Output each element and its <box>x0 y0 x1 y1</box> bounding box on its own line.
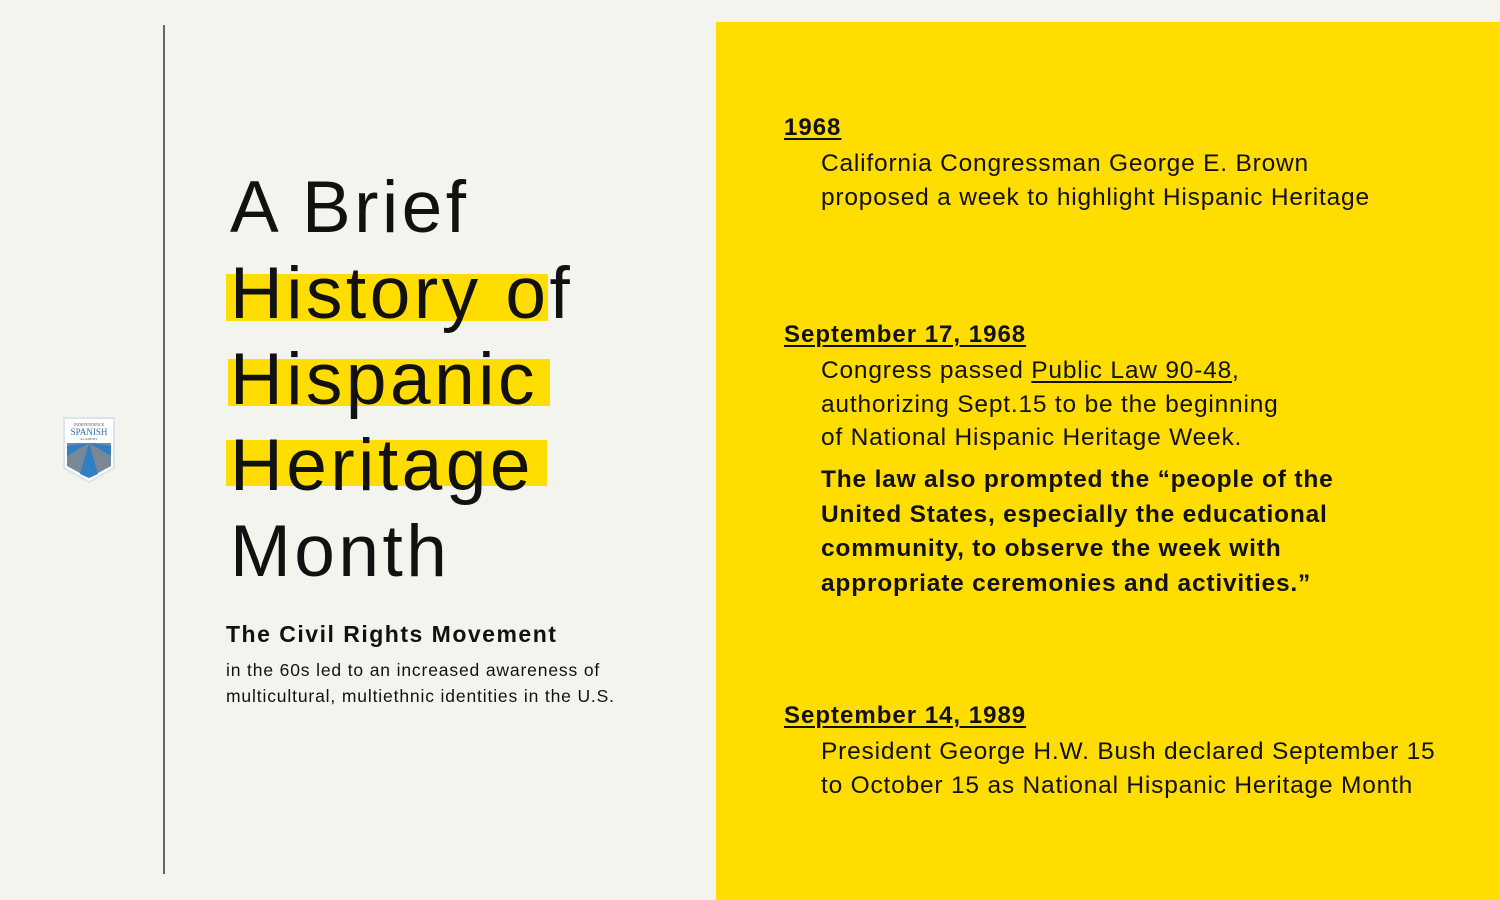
title: Heritage <box>230 425 534 506</box>
icon: school logo shield: INDEPENDENCE <box>74 422 105 427</box>
title <box>226 167 573 592</box>
text block: Public Law 90-48: authorizing Sept.15 to be the beginning <box>821 390 1279 418</box>
text block: Public Law 90-48 <box>821 357 1279 451</box>
title: A Brief <box>230 167 470 248</box>
text block: Public Law 90-48: Congress passed Public Law 90-48, <box>821 357 1240 384</box>
text block: 1968 event: California Congressman George E. Brown <box>821 150 1309 177</box>
text block: 1989 event: to October 15 as National Hispanic Heritage Month <box>821 772 1413 798</box>
panel: timeline <box>716 22 1500 900</box>
quote block: United States, especially the educational <box>821 500 1328 528</box>
text block: 1989 event: President George H.W. Bush declared September 15 <box>821 738 1435 765</box>
vertical divider line <box>163 25 165 874</box>
text block: 1968 event: proposed a week to highlight Hispanic Heritage <box>821 184 1370 210</box>
icon: school logo shield <box>63 417 115 483</box>
text block: civil rights description: in the 60s led to an increased awareness of <box>226 660 600 680</box>
quote block <box>821 466 1334 596</box>
text block: 1968 event <box>821 150 1370 210</box>
text block: 1989 event <box>821 738 1435 798</box>
title: Month <box>230 511 450 592</box>
subtitle: civil rights movement: The Civil Rights Movement <box>226 621 557 647</box>
title: History of <box>230 253 573 334</box>
icon: school logo shield: SPANISH <box>71 427 108 437</box>
heading: September 17, 1968: September 17, 1968 <box>784 321 1026 348</box>
title: Hispanic <box>230 339 538 420</box>
text block: Public Law 90-48: of National Hispanic Heritage Week. <box>821 424 1242 451</box>
quote block: community, to observe the week with <box>821 535 1281 562</box>
heading: 1968: 1968 <box>784 114 841 141</box>
quote block: appropriate ceremonies and activities.” <box>821 570 1311 596</box>
text block: civil rights description: multicultural, multiethnic identities in the U.S. <box>226 686 615 706</box>
icon: school logo shield: ACADEMY <box>80 437 98 441</box>
text block: civil rights description <box>226 660 615 706</box>
heading: September 14, 1989: September 14, 1989 <box>784 702 1026 729</box>
quote block: The law also prompted the “people of the <box>821 466 1334 493</box>
